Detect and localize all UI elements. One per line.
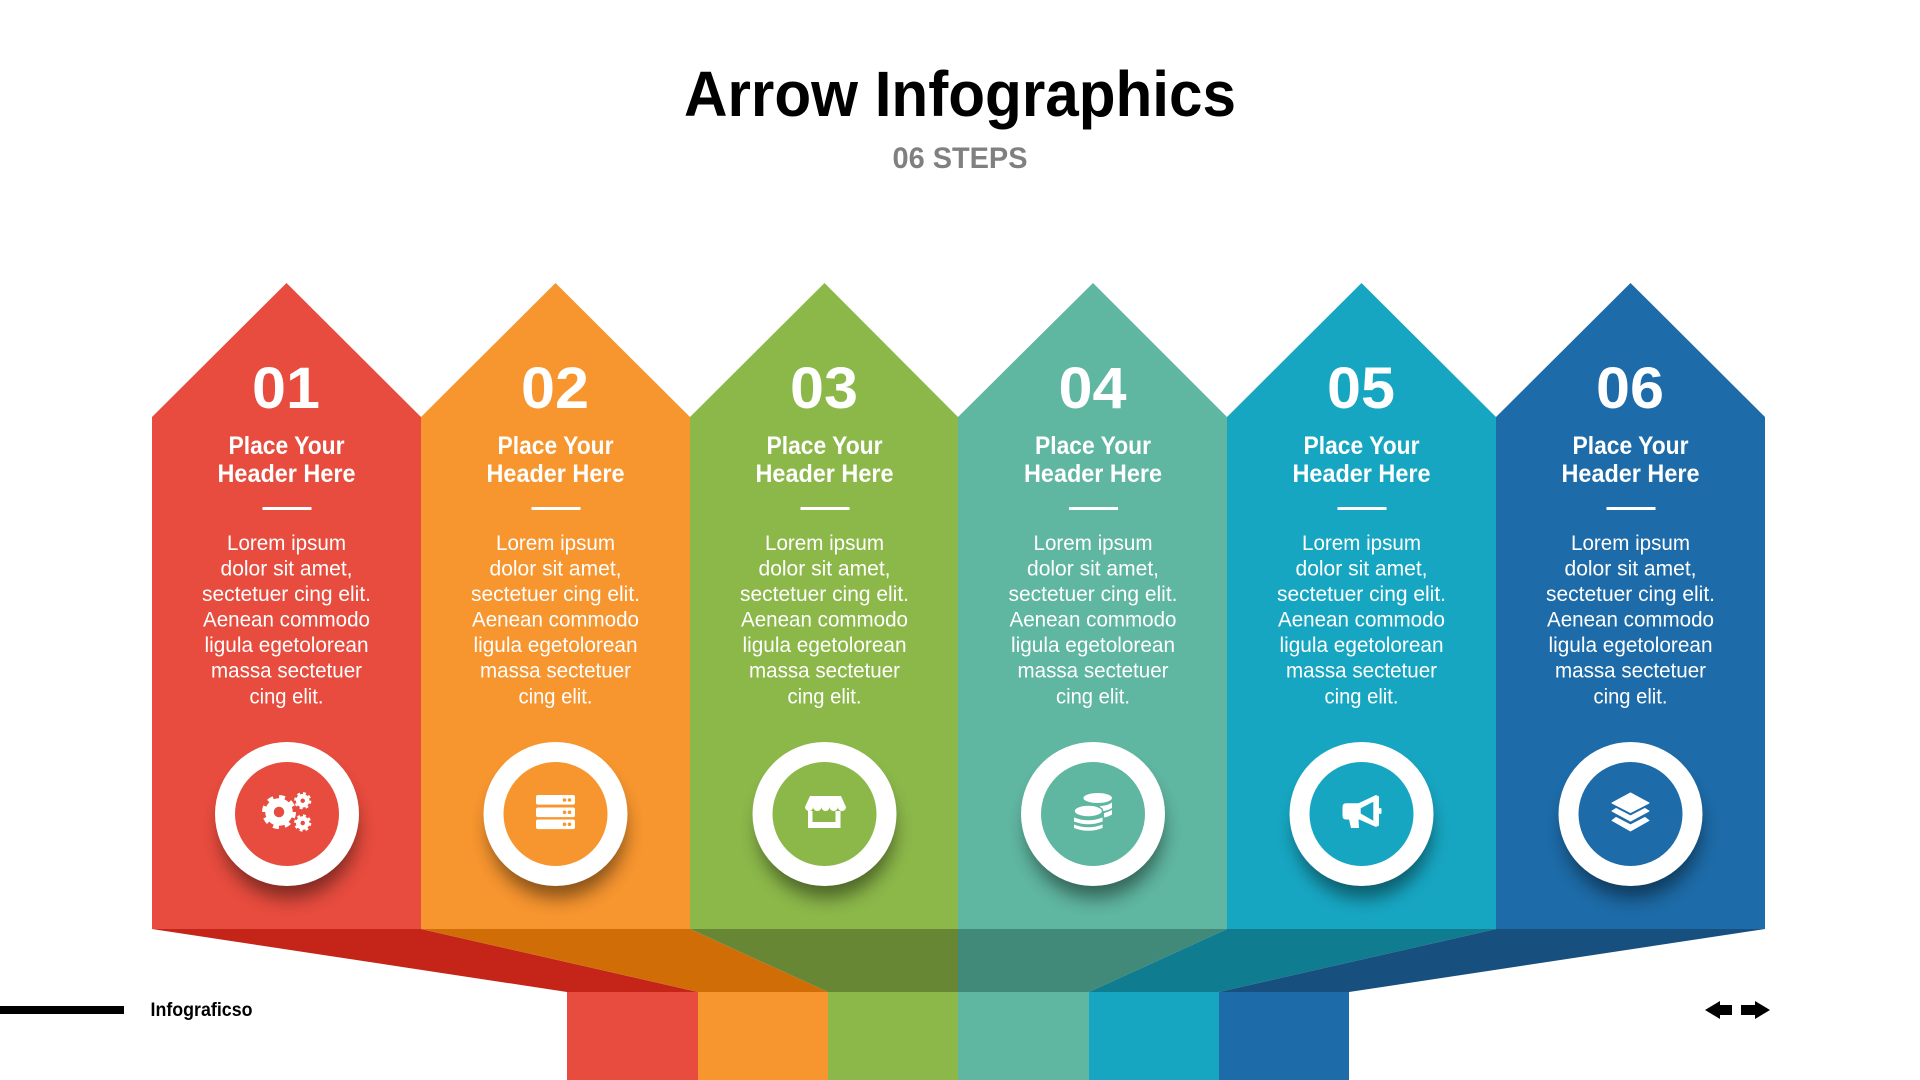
body text 04: Aenean commodo [1010, 608, 1176, 632]
header 02: Place Your [498, 432, 614, 460]
body text 01: massa sectetuer [211, 660, 362, 682]
subtitle: 06 STEPS [892, 142, 1028, 175]
fold: red [152, 929, 698, 992]
number 06: 06 [1596, 356, 1664, 421]
body text 01: sectetuer cing elit. [202, 583, 371, 606]
body text 03: sectetuer cing elit. [740, 583, 909, 606]
header 05 [1292, 432, 1431, 488]
number 03: 03 [790, 356, 858, 421]
badge 01 [215, 742, 359, 898]
body text 02 [471, 532, 640, 708]
arrow shape 05 [1227, 283, 1496, 929]
title: Arrow Infographics [684, 58, 1236, 130]
arrow: previous [1705, 1001, 1732, 1019]
fold: teal [958, 929, 1227, 992]
content 04 [1008, 356, 1178, 898]
body text 05: sectetuer cing elit. [1277, 583, 1446, 606]
body text 06: sectetuer cing elit. [1546, 583, 1715, 606]
body text 01: cing elit. [250, 686, 324, 708]
body text 01: Lorem ipsum [227, 532, 346, 555]
header 02 [486, 432, 625, 488]
header 01 [218, 432, 356, 488]
body text 05 [1277, 532, 1446, 708]
body text 06: cing elit. [1594, 686, 1668, 708]
badge 02 [484, 742, 628, 898]
content 03 [740, 356, 909, 898]
header 06: Header Here [1562, 460, 1700, 488]
header 01: Place Your [228, 432, 345, 460]
body text 03: cing elit. [788, 686, 862, 708]
body text 06: massa sectetuer [1555, 660, 1706, 682]
body text 02: Aenean commodo [472, 608, 639, 632]
strip: green [828, 992, 958, 1080]
body text 02: sectetuer cing elit. [471, 583, 640, 606]
strip: teal [958, 992, 1089, 1080]
body text 05: Lorem ipsum [1302, 532, 1421, 555]
body text 02: dolor sit amet, [490, 558, 622, 580]
number 02: 02 [521, 356, 589, 421]
header 01: Header Here [218, 460, 356, 488]
header 03: Header Here [756, 460, 894, 488]
body text 06: dolor sit amet, [1564, 558, 1696, 580]
body text 05: Aenean commodo [1278, 608, 1445, 632]
strip: orange [698, 992, 828, 1080]
header 06: Place Your [1572, 432, 1689, 460]
body text 03 [740, 532, 909, 708]
body text 01: ligula egetolorean [204, 634, 368, 657]
icon: coins [1074, 793, 1112, 831]
arrow shape 01 [152, 283, 421, 929]
panel: step 03 [690, 283, 958, 929]
arrow shape 03 [690, 283, 958, 929]
funnel: folded shadows and bottom strips [152, 929, 1765, 1080]
arrow: next [1741, 1001, 1770, 1019]
panel: step 06 [1496, 283, 1765, 929]
header 05: Place Your [1304, 432, 1420, 460]
body text 03: Aenean commodo [741, 608, 908, 632]
body text 02: Lorem ipsum [496, 532, 615, 555]
header 04 [1024, 432, 1162, 488]
badge 05 [1290, 742, 1434, 898]
content 05 [1277, 356, 1446, 898]
fold: navy [1219, 929, 1765, 992]
body text 05: dolor sit amet, [1296, 558, 1428, 580]
strip: red [567, 992, 698, 1080]
content 01 [202, 356, 371, 898]
body text 05: ligula egetolorean [1280, 634, 1444, 657]
body text 04: Lorem ipsum [1034, 532, 1152, 555]
body text 02: ligula egetolorean [474, 634, 638, 657]
body text 03: massa sectetuer [749, 660, 900, 682]
body text 05: cing elit. [1324, 686, 1398, 708]
body text 04: dolor sit amet, [1027, 558, 1159, 580]
body text 02: massa sectetuer [480, 660, 631, 682]
fold: green [690, 929, 958, 992]
header 04: Place Your [1035, 432, 1151, 460]
body text 03: ligula egetolorean [742, 634, 906, 657]
header 02: Header Here [486, 460, 625, 488]
body text 02: cing elit. [518, 686, 592, 708]
badge 04 [1021, 742, 1165, 898]
header 06 [1562, 432, 1700, 488]
fold: orange [421, 929, 828, 992]
icon: gears [264, 793, 310, 830]
icon: layers [1612, 793, 1649, 831]
strip: blue [1089, 992, 1219, 1080]
header 03: Place Your [766, 432, 883, 460]
footer bar [0, 1006, 124, 1014]
body text 04: sectetuer cing elit. [1008, 583, 1178, 606]
header 04: Header Here [1024, 460, 1162, 488]
arrow shape 02 [421, 283, 690, 929]
icon: server [536, 795, 575, 829]
icon: storefront [805, 796, 846, 828]
body text 06: ligula egetolorean [1548, 634, 1712, 657]
number 01: 01 [252, 356, 320, 421]
arrow shape 04 [958, 283, 1227, 929]
body text 04 [1008, 532, 1178, 708]
content 02 [471, 356, 640, 898]
icon: megaphone [1342, 795, 1382, 828]
panel: step 01 [152, 283, 421, 929]
panel: step 04 [958, 283, 1227, 929]
body text 06 [1546, 532, 1715, 708]
body text 01: dolor sit amet, [220, 558, 352, 580]
body text 04: massa sectetuer [1018, 660, 1168, 682]
badge 06 [1558, 742, 1702, 898]
number 05: 05 [1327, 356, 1395, 421]
body text 03: Lorem ipsum [765, 532, 884, 555]
body text 04: cing elit. [1056, 686, 1130, 708]
badge 03 [752, 742, 896, 898]
header 05: Header Here [1292, 460, 1431, 488]
header 03 [756, 432, 894, 488]
body text 01: Aenean commodo [203, 608, 370, 632]
content 06 [1546, 356, 1715, 898]
body text 05: massa sectetuer [1286, 660, 1437, 682]
panel: step 02 [421, 283, 690, 929]
panel: step 05 [1227, 283, 1496, 929]
body text 01 [202, 532, 371, 708]
number 04: 04 [1058, 356, 1126, 421]
body text 04: ligula egetolorean [1011, 634, 1175, 657]
footer brand: Infograficso [150, 1000, 252, 1021]
body text 06: Lorem ipsum [1571, 532, 1690, 555]
arrow shape 06 [1496, 283, 1765, 929]
fold: blue [1089, 929, 1496, 992]
body text 03: dolor sit amet, [758, 558, 890, 580]
strip: navy [1219, 992, 1349, 1080]
body text 06: Aenean commodo [1547, 608, 1714, 632]
